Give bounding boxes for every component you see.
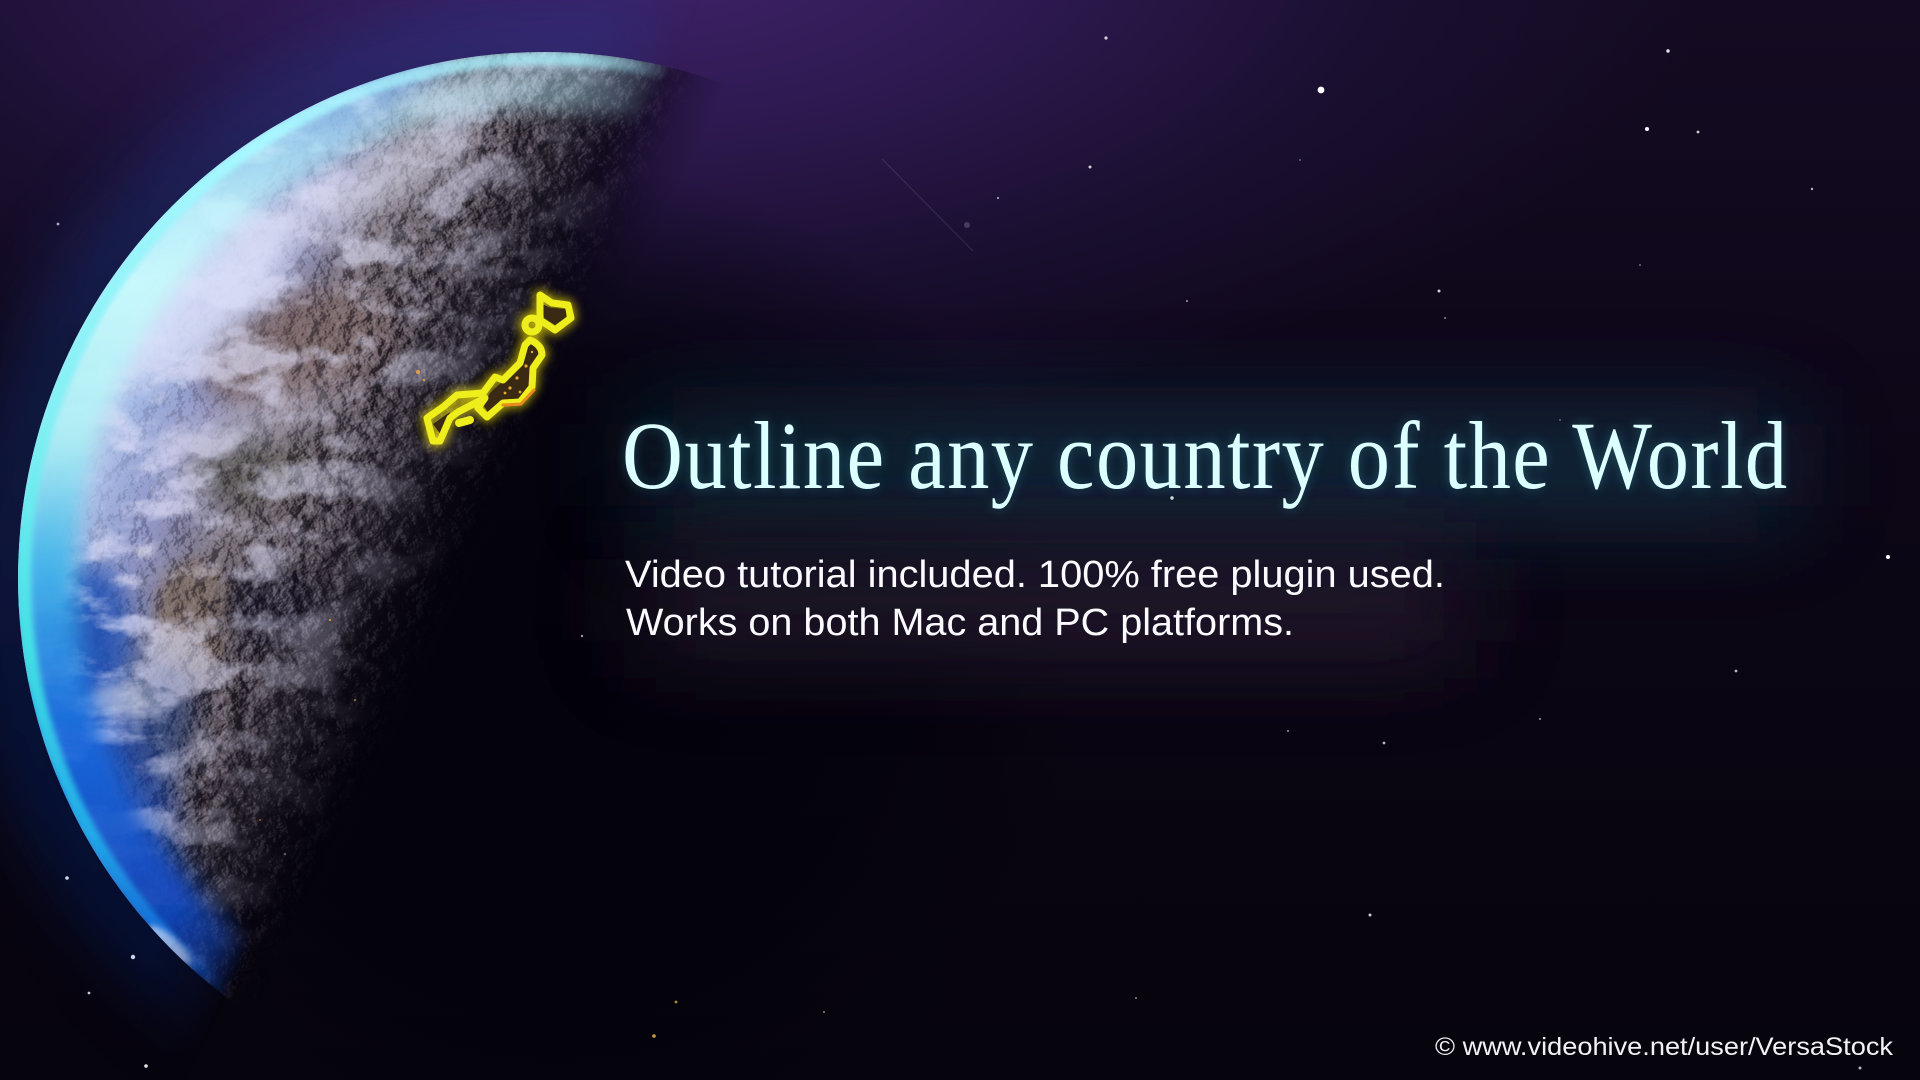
copyright credit: © www.videohive.net/user/VersaStock <box>1435 1033 1894 1061</box>
description text: Video tutorial included. 100% free plugin used. <box>625 554 1445 596</box>
Japan stroke <box>427 295 571 441</box>
Japan land fill <box>433 304 566 435</box>
description text: Works on both Mac and PC platforms. <box>626 602 1294 644</box>
title: Outline any country of the World <box>622 402 1787 509</box>
earth: limb light <box>18 52 666 995</box>
icon: Japan neon outline <box>427 295 571 441</box>
faint meteor streak <box>882 159 973 251</box>
Japan glow <box>427 295 571 441</box>
earth: clouds <box>18 52 664 966</box>
Japan lights <box>504 351 533 394</box>
Japan orange edge <box>503 390 534 405</box>
description text <box>625 554 1445 644</box>
earth: land patches <box>157 267 412 670</box>
text backdrop glow <box>640 420 1790 645</box>
earth: city lights <box>259 370 425 821</box>
earth: ocean <box>32 62 440 922</box>
atmosphere glow behind earth <box>0 0 651 1030</box>
earth globe <box>18 52 712 1000</box>
earth: relief texture <box>77 52 673 998</box>
